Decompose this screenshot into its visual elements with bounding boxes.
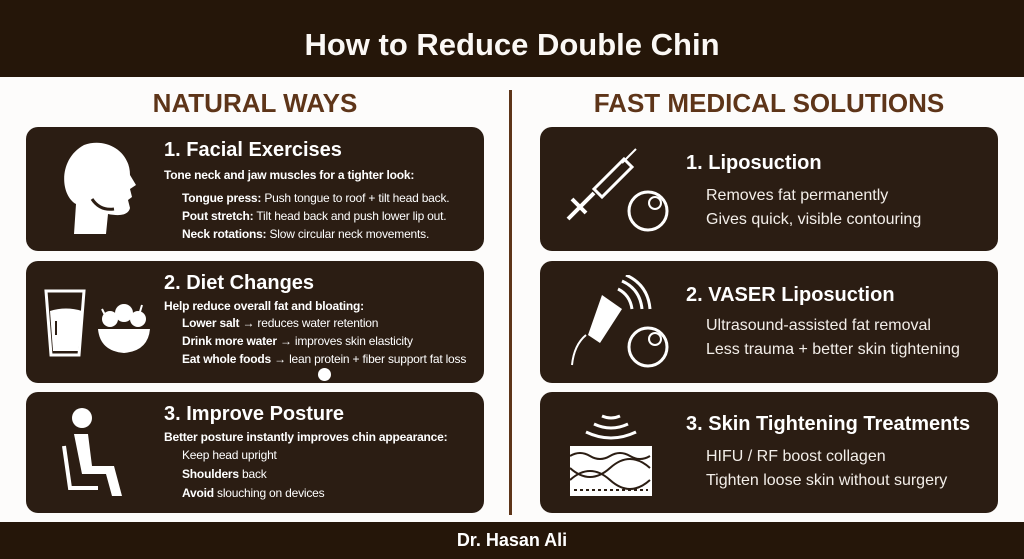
panel: facial exercises: [26, 127, 484, 251]
panel: facial exercises: Pout stretch: Tilt head back and push lower lip out.: [182, 209, 446, 223]
panel: facial exercises: Neck rotations: Slow circular neck movements.: [182, 227, 429, 241]
panel: liposuction: [540, 127, 998, 251]
panel: skin tightening treatments: Tighten loose skin without surgery: [706, 472, 947, 489]
text: liposuction: 1. Liposuction: [686, 152, 822, 174]
icon: water glass and salad bowl: [44, 290, 150, 356]
panel: vaser liposuction: Less trauma + better skin tightening: [706, 341, 960, 358]
header bar: [0, 0, 1024, 77]
panel: liposuction: Gives quick, visible contouring: [706, 211, 921, 228]
panel: diet changes: Lower salt → reduces water retention: [182, 316, 378, 330]
panel: diet changes: Help reduce overall fat and bloating:: [164, 299, 364, 313]
panel: improve posture: Shoulders back: [182, 467, 267, 481]
panel: diet changes: Drink more water → improves skin elasticity: [182, 334, 413, 348]
panel: skin tightening treatments: [540, 392, 998, 513]
icon: syringe and fat cell: [566, 148, 668, 232]
panel: diet changes: [26, 261, 484, 383]
footer: [0, 522, 1024, 559]
text: skin tightening: 3. Skin Tightening Treatments: [686, 413, 970, 435]
footer text: author: Dr. Hasan Ali: [457, 530, 567, 550]
icon: head profile: [64, 142, 136, 234]
panel: improve posture: [26, 392, 484, 513]
panel: vaser liposuction: Ultrasound-assisted fat removal: [706, 317, 931, 334]
panel: facial exercises: Tongue press: Push tongue to roof + tilt head back.: [182, 191, 449, 205]
heading: fast medical solutions: FAST MEDICAL SOLUTIONS: [594, 88, 944, 118]
heading: natural ways: NATURAL WAYS: [153, 88, 357, 118]
text: diet changes: 2. Diet Changes: [164, 272, 314, 294]
icon: ultrasound probe and fat cell: [571, 275, 668, 368]
panel: improve posture: Keep head upright: [182, 448, 277, 462]
panel: improve posture: Better posture instantly improves chin appearance:: [164, 430, 447, 444]
text: facial exercises: 1. Facial Exercises: [164, 139, 342, 161]
text: improve posture: 3. Improve Posture: [164, 403, 344, 425]
panel: diet changes: Eat whole foods → lean protein + fiber support fat loss: [182, 352, 466, 366]
panel: skin tightening treatments: HIFU / RF boost collagen: [706, 448, 886, 465]
panel: facial exercises: Tone neck and jaw muscles for a tighter look:: [164, 168, 414, 182]
panel: vaser liposuction: [540, 261, 998, 383]
text: vaser liposuction: 2. VASER Liposuction: [686, 284, 895, 306]
title: How to Reduce Double Chin: [304, 27, 720, 62]
panel: liposuction: Removes fat permanently: [706, 187, 888, 204]
icon: seated person: [62, 408, 122, 496]
panel: improve posture: Avoid slouching on devices: [182, 486, 324, 500]
icon: skin layers with waves: [570, 414, 652, 496]
